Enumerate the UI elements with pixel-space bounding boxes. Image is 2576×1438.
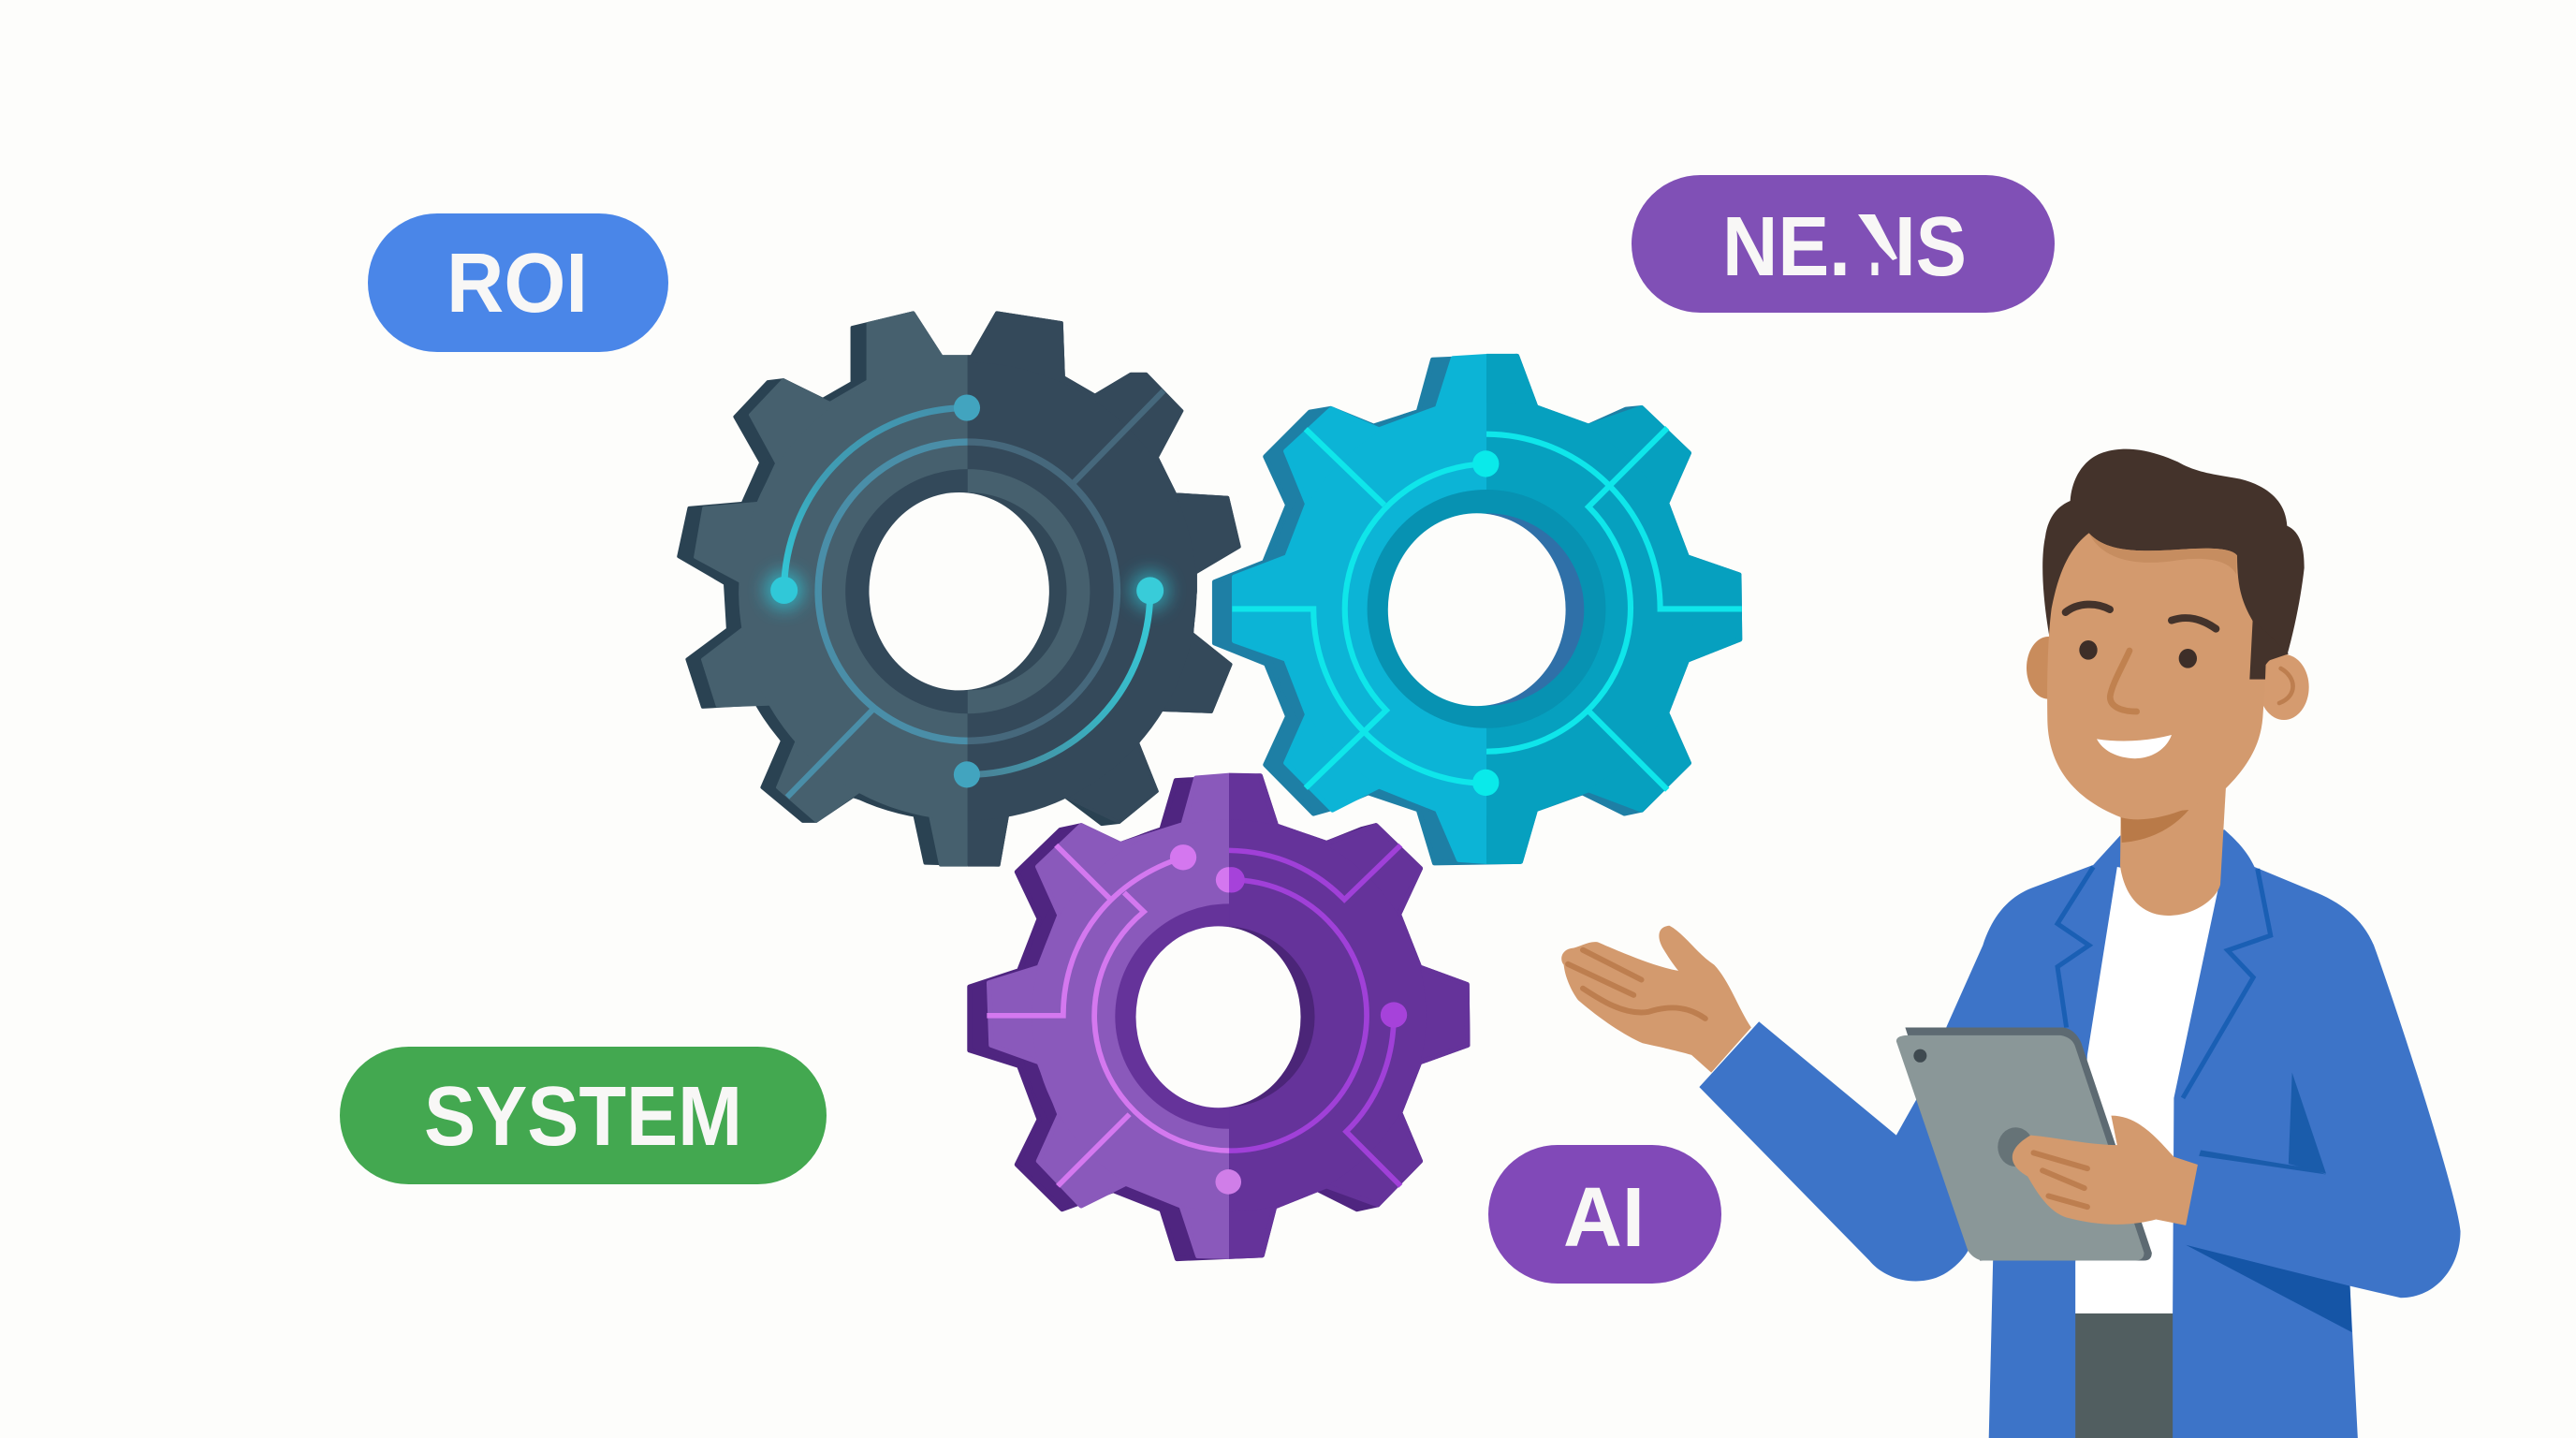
- hair: [2042, 449, 2305, 681]
- gear circuit ring: [818, 442, 1117, 741]
- pill: AI: AI: [1563, 1171, 1645, 1265]
- pill: AI: [1488, 1145, 1721, 1284]
- gear body silhouette: [679, 313, 1239, 865]
- tablet: [1896, 1028, 2152, 1260]
- gear hub ring: [1368, 490, 1605, 728]
- open hand: [1561, 926, 1751, 1073]
- gear hub ring: [845, 469, 1090, 713]
- gear circuit traces: [765, 390, 1169, 797]
- gear hub ring: [1115, 903, 1315, 1129]
- nose: [2110, 651, 2137, 712]
- person: neck: [2120, 786, 2226, 916]
- neck shadow: [2121, 810, 2188, 843]
- gear circuit nodes: [1170, 844, 1407, 1195]
- jacket lapels: [2057, 867, 2271, 1098]
- gear circuit traces: [987, 845, 1400, 1186]
- shirt: [2075, 867, 2218, 1313]
- gear: cyan: [1215, 357, 1742, 863]
- gear lit left face: [694, 311, 968, 867]
- gear right face: [968, 311, 1241, 867]
- person: torso, arm and jacket: [1561, 829, 2461, 1438]
- gear: purple: [970, 775, 1468, 1258]
- pill: ROI: [368, 213, 668, 352]
- hair sideburn: [2249, 620, 2289, 680]
- jacket fold: [2186, 1245, 2351, 1332]
- person presenter: [1561, 449, 2461, 1438]
- gear circuit nodes: [770, 394, 1164, 788]
- inner ear: [2279, 668, 2293, 703]
- gear lit left face: [1232, 354, 1486, 864]
- person: head: [2027, 449, 2309, 843]
- gear right face: [1229, 773, 1470, 1259]
- pill: ROI: ROI: [446, 237, 588, 330]
- gear right face: [1486, 354, 1743, 865]
- eyes: [2079, 640, 2197, 668]
- face: [2047, 533, 2265, 819]
- hand holding tablet: [2012, 1116, 2198, 1225]
- gear lit left face: [987, 773, 1229, 1259]
- pill: NE.\S garbled label: .: [1868, 200, 1881, 294]
- gear circuit traces: [1232, 428, 1742, 790]
- right ear: [2259, 654, 2309, 720]
- jacket pocket: [2199, 1073, 2326, 1174]
- eyebrows: [2066, 605, 2216, 629]
- gear body silhouette: [970, 776, 1468, 1258]
- pill: SYSTEM: SYSTEM: [424, 1070, 742, 1164]
- jacket: [1699, 829, 2461, 1438]
- pill: NE.\S garbled label: NE.: [1722, 200, 1851, 294]
- trousers: [2075, 1313, 2173, 1438]
- pill: SYSTEM: [340, 1047, 827, 1184]
- gear: dark slate: [679, 313, 1239, 865]
- pill: NE.\S garbled label: [1632, 175, 2055, 313]
- pill: NE.\S garbled label: IS: [1895, 200, 1967, 294]
- gear body silhouette: [1215, 357, 1740, 863]
- mouth: [2097, 735, 2172, 758]
- left ear: [2027, 637, 2071, 699]
- forehead shadow: [2089, 533, 2237, 574]
- gear circuit nodes: [1472, 450, 1499, 796]
